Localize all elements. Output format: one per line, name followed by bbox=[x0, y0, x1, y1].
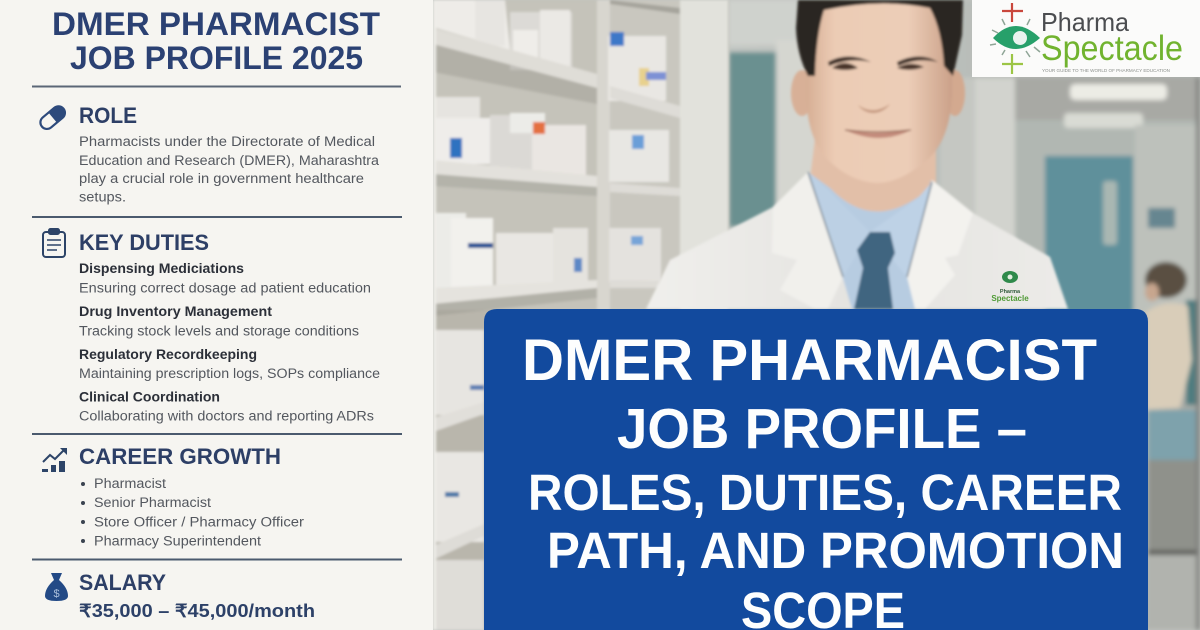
lapels bbox=[772, 172, 843, 309]
career ladder list: Senior Pharmacist bbox=[94, 495, 211, 510]
eyebrows bbox=[828, 56, 871, 66]
lower rows bbox=[434, 330, 484, 415]
section: key duties: Ensuring correct dosage ad patient education bbox=[79, 280, 371, 296]
mouth bbox=[845, 130, 911, 138]
section: career growth bbox=[42, 444, 305, 548]
section: key duties: KEY DUTIES bbox=[79, 230, 209, 255]
section: key duties bbox=[43, 229, 380, 424]
logo: Pharma Spectacle: YOUR GUIDE TO THE WORLD OF PHARMACY EDUCATION bbox=[1042, 68, 1170, 73]
corridor wall and doors bbox=[728, 0, 1200, 630]
section: role: play a crucial role in government healthcare bbox=[79, 171, 364, 186]
sidebar title: DMER PHARMACIST bbox=[52, 6, 380, 42]
face bbox=[806, 0, 952, 183]
coat bbox=[646, 172, 1068, 309]
ears bbox=[791, 70, 813, 116]
section: key duties: Drug Inventory Management bbox=[79, 304, 273, 319]
section: key duties: Regulatory Recordkeeping bbox=[79, 347, 257, 362]
section: role: setups. bbox=[79, 190, 126, 204]
headline text: JOB PROFILE – bbox=[617, 397, 1027, 461]
icon: clipboard bbox=[43, 229, 65, 257]
headline text: DMER PHARMACIST bbox=[522, 328, 1097, 393]
section: salary: ₹35,000 – ₹45,000/month bbox=[79, 601, 315, 621]
coat logo bbox=[991, 271, 1029, 303]
career ladder list: Pharmacy Superintendent bbox=[94, 534, 261, 548]
icon: money bag: $ bbox=[53, 588, 60, 600]
panel: left sidebar bbox=[0, 0, 433, 630]
section: salary bbox=[45, 570, 315, 621]
section: key duties: Clinical Coordination bbox=[79, 390, 220, 404]
hair bbox=[796, 0, 963, 76]
eyes bbox=[832, 63, 858, 70]
boxes second row bbox=[436, 97, 480, 157]
section: career growth: CAREER GROWTH bbox=[79, 444, 281, 469]
logo: Pharma Spectacle bbox=[972, 0, 1200, 77]
section: key duties: Tracking stock levels and storage conditions bbox=[79, 324, 359, 338]
icon: capsule bbox=[38, 104, 68, 132]
boxes top row bbox=[436, 0, 510, 50]
section: role bbox=[38, 103, 380, 204]
headline text bbox=[522, 328, 1124, 630]
section: key duties: Collaborating with doctors and reporting ADRs bbox=[79, 408, 374, 424]
coat logo: Spectacle bbox=[991, 294, 1029, 303]
icon: eye with crosses bbox=[990, 3, 1040, 74]
section: role: Education and Research (DMER), Maharashtra bbox=[79, 153, 380, 168]
section: key duties: Dispensing Mediciations bbox=[79, 261, 244, 276]
career ladder list: Pharmacist bbox=[94, 476, 166, 491]
icon: money bag bbox=[45, 573, 68, 601]
photo background: pharmacy shelves and hospital corridor bbox=[433, 0, 1200, 630]
boxes third row bbox=[434, 213, 466, 288]
section: salary: SALARY bbox=[79, 570, 166, 595]
neck bbox=[810, 130, 936, 232]
icon: growth chart bbox=[42, 448, 67, 472]
sidebar title bbox=[52, 6, 380, 76]
tie bbox=[854, 232, 895, 309]
career ladder list bbox=[81, 476, 305, 548]
logo: Pharma Spectacle: Pharma bbox=[1041, 7, 1130, 37]
nose bbox=[858, 104, 890, 113]
shelf edges bbox=[433, 28, 597, 88]
headline text: PATH, AND PROMOTION bbox=[547, 522, 1124, 579]
logo: Pharma Spectacle: Spectacle bbox=[1041, 29, 1183, 68]
panel: blue headline banner bbox=[484, 309, 1148, 630]
shirt bbox=[808, 172, 934, 309]
headline text: ROLES, DUTIES, CAREER bbox=[528, 464, 1122, 521]
career ladder list: Store Officer / Pharmacy Officer bbox=[94, 514, 305, 530]
section: role: ROLE bbox=[79, 103, 137, 128]
doctor in white coat bbox=[646, 0, 1068, 309]
section: role: Pharmacists under the Directorate of Medical bbox=[79, 134, 375, 149]
coat logo: Pharma bbox=[1000, 289, 1021, 295]
section: key duties: Maintaining prescription logs, SOPs compliance bbox=[79, 366, 380, 381]
pharmacy shelf unit bbox=[433, 0, 729, 630]
sidebar title: JOB PROFILE 2025 bbox=[70, 40, 363, 76]
